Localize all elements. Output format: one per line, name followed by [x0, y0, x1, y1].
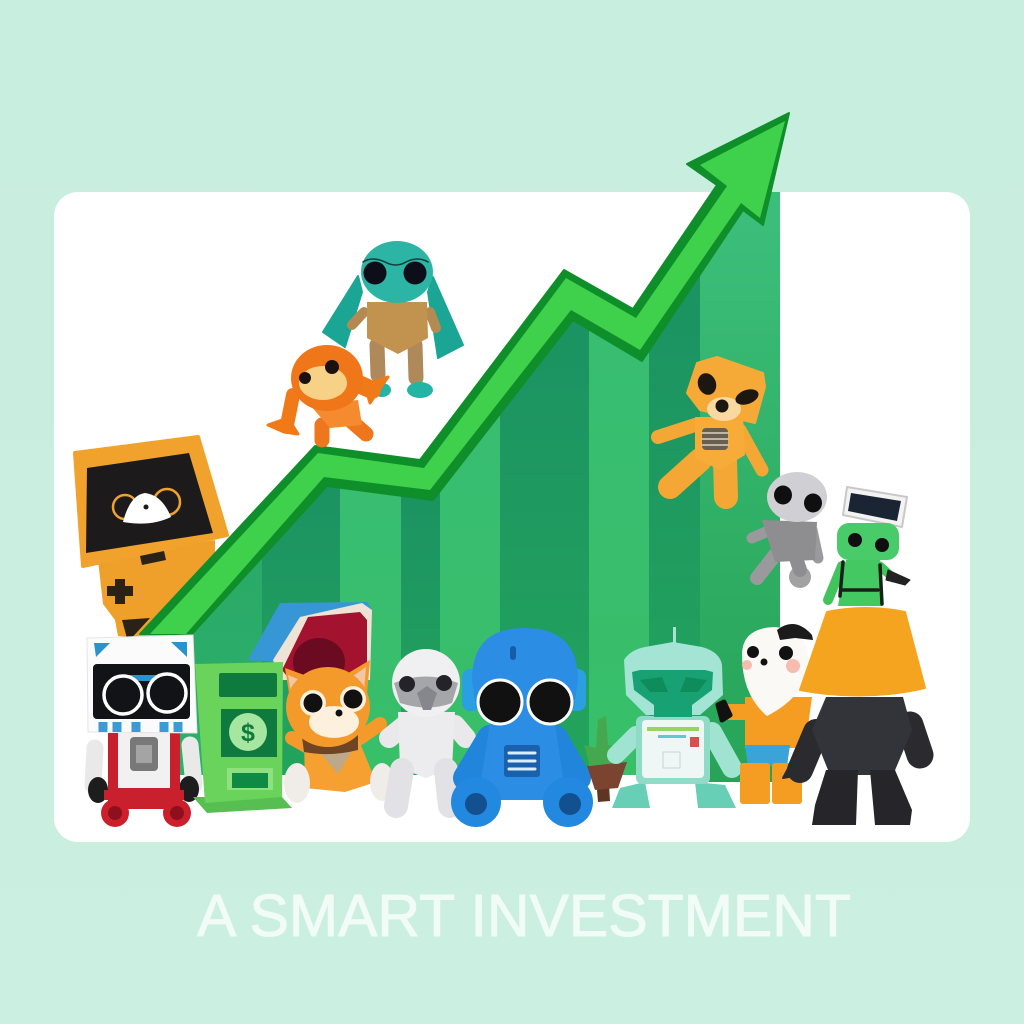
- icon: orange monkey toy: [268, 345, 388, 440]
- icon: blue robot with sunglasses: [451, 628, 593, 827]
- title: A SMART INVESTMENT: [197, 883, 851, 949]
- bar chart: [160, 192, 780, 782]
- icon: orange fox toy: [284, 660, 394, 803]
- icon: grey robot toy: [752, 472, 827, 588]
- panel: white chart card: [54, 192, 970, 842]
- icon: orange handheld console toy: [75, 437, 227, 642]
- icon: yellow-orange bear robot toy: [658, 357, 765, 497]
- icon: teal alien toy: [323, 241, 463, 398]
- icon: green dollar kiosk: [193, 662, 292, 813]
- icon: red and blue arch box: [248, 602, 372, 686]
- icon: red and white robot with glasses: [87, 635, 199, 827]
- icon: black figure with orange shade hat: [783, 608, 925, 825]
- arrow: rising growth line: [140, 113, 789, 634]
- icon: white dog toy in orange overalls: [718, 624, 813, 804]
- icon: green robot with screen hat: [828, 487, 910, 606]
- icon: white armoured toy: [389, 649, 466, 806]
- icon: mint robot toy: [612, 627, 736, 808]
- icon: green dollar kiosk: $: [241, 719, 255, 747]
- icon: potted cactus: [584, 716, 627, 802]
- infographic canvas: [54, 112, 970, 937]
